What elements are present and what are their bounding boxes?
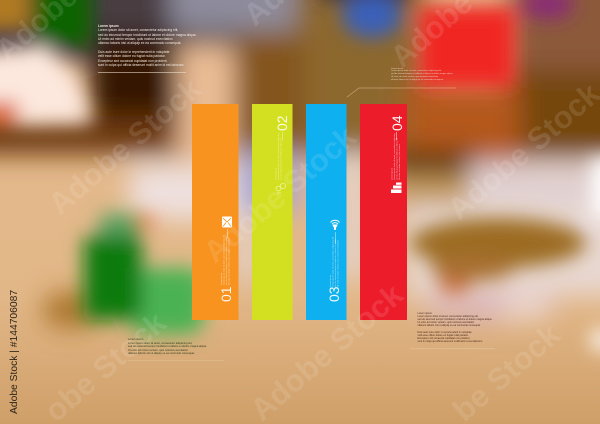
text block: bottom right: Lorem ipsum (418, 312, 432, 314)
number 04: 04 (389, 115, 405, 131)
divider line: bottom right (410, 348, 495, 350)
text block: top left: ullamco laboris nisi ut aliquip ex ea commodo consequat. (98, 41, 181, 45)
text block: bottom right: ullamco laboris nisi ut aliquip ex ea commodo consequat. (418, 324, 481, 327)
corner olive and green (0, 0, 30, 30)
text 04: Lorem ipsum (390, 168, 394, 180)
text block: top left: Lorem ipsum dolor sit amet, consectetur adipiscing elit, (98, 28, 178, 32)
text block: bottom right: Ut enim ad minim veniam, quis nostrud exercitation (418, 321, 474, 324)
text block: top left: Ut enim ad minim veniam, quis nostrud exercitation (98, 37, 173, 41)
text 04 (390, 132, 401, 180)
text 02: sed do eiusmod tempor incididunt ut labore et (280, 138, 282, 180)
number 02: 02 (274, 115, 290, 131)
watermarks: Adobe Stock (42, 70, 208, 222)
watermarks: Adobe Stock (197, 118, 363, 270)
text block: bottom left: Lorem ipsum (128, 338, 143, 341)
text block: bottom left: sed do eiusmod tempor incididunt ut labore et dolore magna aliqua. (128, 345, 207, 348)
text 03: sed do eiusmod tempor incididunt ut labore et dolore (334, 238, 337, 287)
text block: top right: Lorem ipsum (391, 68, 403, 70)
divider line: top left (98, 71, 186, 74)
text block: bottom right (418, 312, 492, 343)
text block: bottom left: Lorem ipsum dolor sit amet, consectetur adipiscing elit, (128, 342, 192, 345)
text block: bottom left: ullamco laboris nisi ut aliquip ex ea commodo consequat. (128, 352, 195, 355)
text 04: sed do eiusmod tempor incididunt ut labore et (396, 138, 398, 180)
bar 04 red (360, 104, 407, 320)
text 01: Lorem ipsum (220, 273, 223, 285)
icon: envelope (222, 216, 232, 228)
text 03 (329, 237, 340, 287)
text block: top right: ullamco laboris nisi ut aliquip ex ea commodo consequat. (391, 79, 444, 81)
icon: bar chart (391, 182, 402, 193)
text block: top left: Lorem ipsum (98, 24, 119, 28)
number 03: 03 (326, 286, 342, 302)
text block: top left: Duis aute irure dolor in reprehenderit in voluptate (98, 50, 169, 54)
icon: wifi signal (330, 220, 340, 230)
text block: top right: sed do eiusmod tempor incididunt ut labore et dolore magna aliqua. (391, 73, 453, 75)
connector line: top right (347, 88, 456, 97)
text block: top left: sunt in culpa qui officia deserunt mollit anim id est laborum. (98, 63, 184, 67)
icon: cogs (276, 183, 286, 193)
text 03: Ut enim ad minim veniam, quis nostrud exercitation (336, 239, 340, 287)
divider line: bottom left (128, 360, 224, 362)
bar 03 blue (306, 104, 346, 320)
text block: bottom right: sed do eiusmod tempor incididunt ut labore et dolore magna aliqua. (418, 318, 492, 321)
text 03: Lorem ipsum (329, 275, 332, 287)
text block: top right: Ut enim ad minim veniam, quis nostrud exercitation (391, 76, 438, 78)
white spots (592, 158, 600, 218)
text 02: Lorem ipsum dolor sit amet, consectetur adipiscing (277, 132, 280, 180)
credit: Adobe Stock id: Adobe Stock | #144706087 (9, 290, 20, 414)
text 01 (220, 235, 230, 285)
khaki oval (410, 218, 586, 268)
text block: top right: Lorem ipsum dolor sit amet, consectetur adipiscing elit, (391, 70, 442, 72)
text 02: Lorem ipsum (274, 168, 278, 180)
text block: top left: Excepteur sint occaecat cupidatat non proident, (98, 59, 167, 63)
pink blob (0, 46, 94, 124)
text block: bottom right: Lorem ipsum dolor sit amet, consectetur adipiscing elit, (418, 315, 478, 318)
watermarks: Adobe Stock (244, 276, 410, 424)
text block: bottom left (128, 338, 207, 355)
text 02 (274, 132, 282, 180)
text block: bottom left: Ut enim ad minim veniam, quis nostrud exercitation (128, 349, 188, 352)
text 04: Lorem ipsum dolor sit amet, consectetur adipiscing (393, 132, 396, 180)
text block: bottom right: velit esse cillum dolore eu fugiat nulla pariatur. (418, 334, 469, 337)
text 01: Lorem ipsum dolor sit amet, consectetur adipiscing elit (222, 235, 226, 285)
text block: top left: velit esse cillum dolore eu fugiat nulla pariatur. (98, 54, 165, 58)
text block: bottom right: Excepteur sint occaecat cupidatat non proident, (418, 337, 470, 340)
bar 02 lime (252, 104, 292, 320)
text 03: Lorem ipsum dolor sit amet, consectetur adipiscing elit (332, 237, 334, 287)
red object (418, 6, 516, 88)
text 04: Ut enim ad minim veniam, quis nostrud (398, 143, 401, 180)
green object (130, 268, 204, 334)
bar 01 orange (192, 104, 238, 320)
number 01: 01 (218, 286, 234, 302)
text block: top left: sed do eiusmod tempor incididunt ut labore et dolore magna aliqua. (98, 33, 196, 37)
text block: bottom right: Duis aute irure dolor in reprehenderit in voluptate (418, 331, 472, 334)
text block: top left (98, 24, 196, 67)
text block: bottom right: sunt in culpa qui officia deserunt mollit anim id est laborum. (418, 340, 483, 343)
text block: top right (391, 68, 453, 81)
text 01: Ut enim ad minim veniam, quis nostrud exercitation (228, 237, 230, 285)
text 01: sed do eiusmod tempor incididunt ut labore et dolore (225, 236, 228, 285)
